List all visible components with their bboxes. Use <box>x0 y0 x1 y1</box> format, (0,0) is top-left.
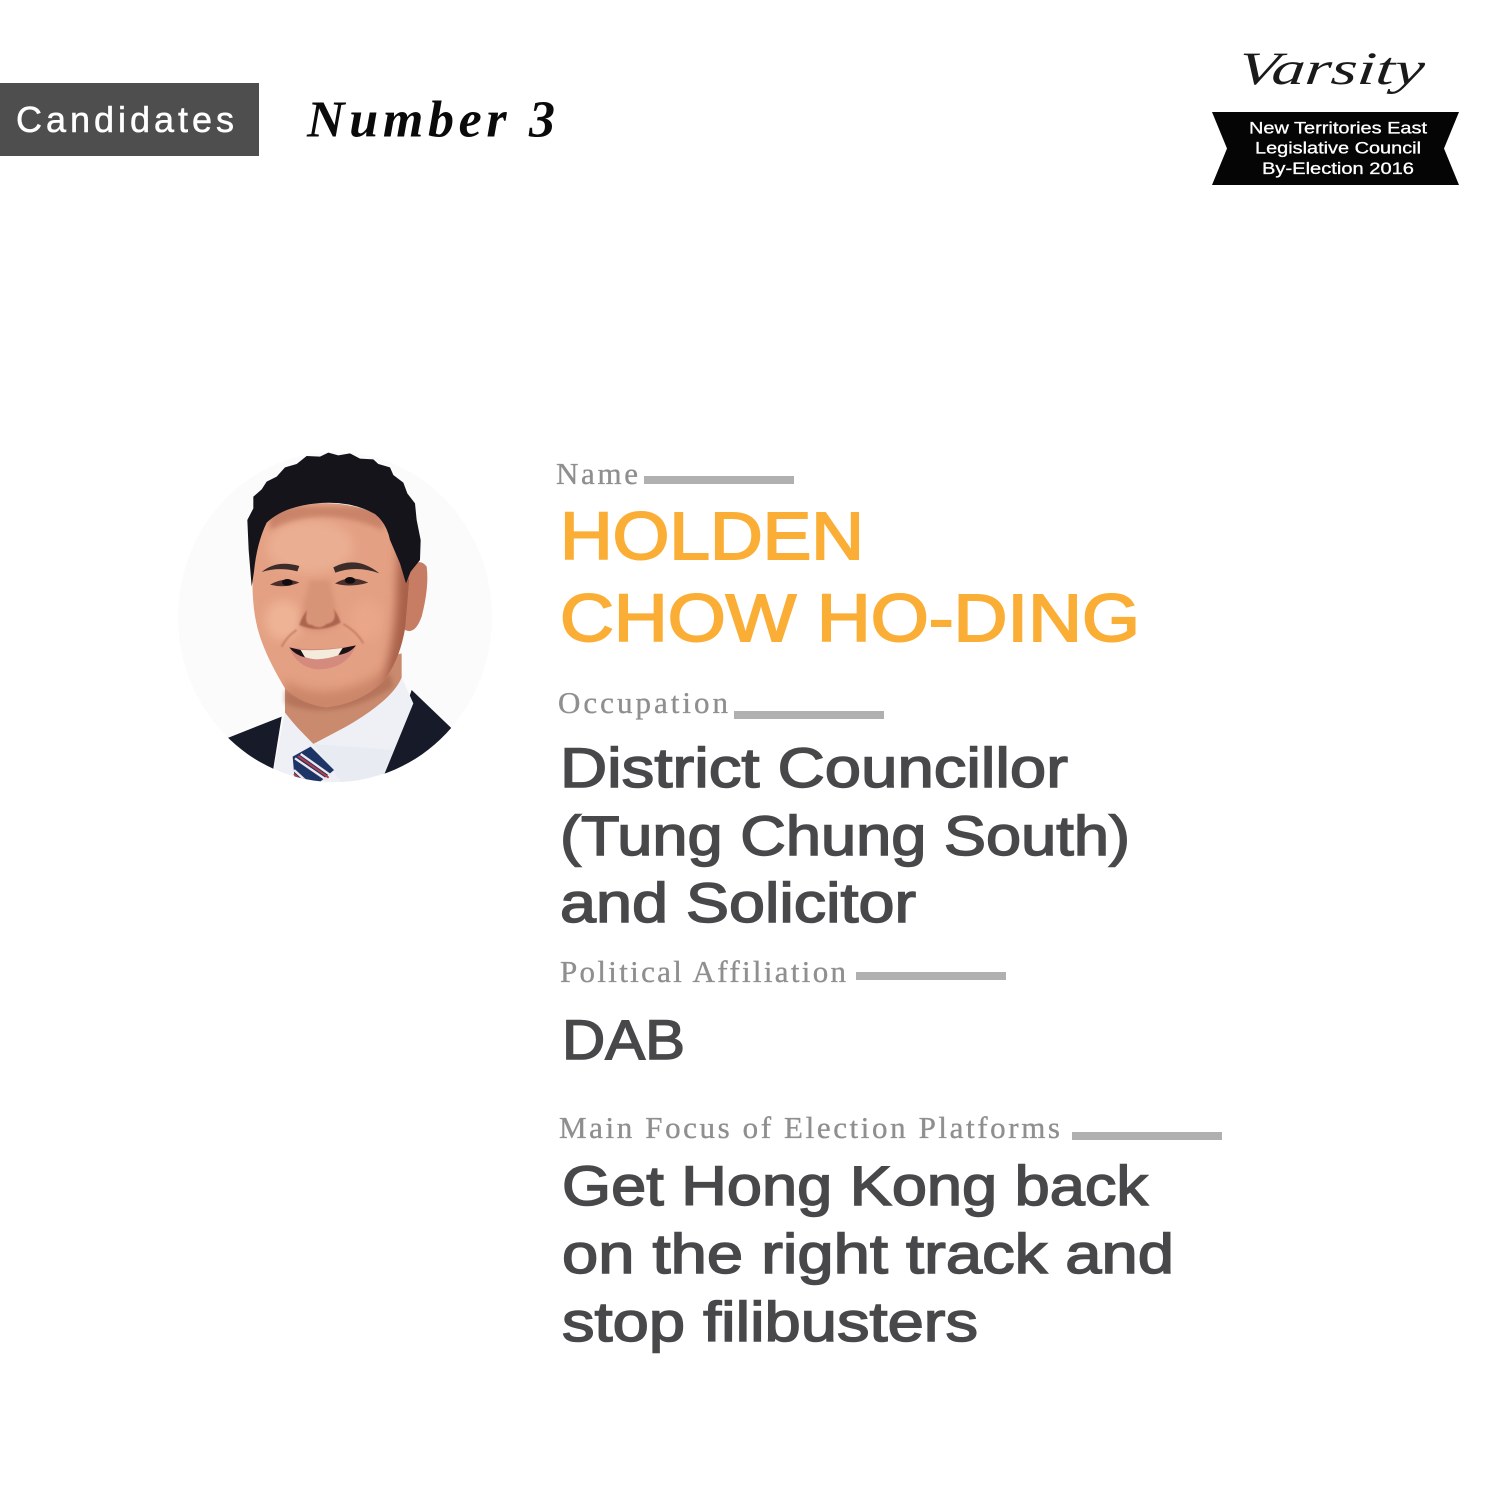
label: Main Focus of Election Platforms: Main Focus of Election Platforms <box>559 1110 1060 1145</box>
jacket <box>228 690 452 774</box>
tag: Candidates: Candidates <box>16 99 234 140</box>
portrait: candidate photo <box>228 452 452 782</box>
logo: Varsity: Varsity <box>1236 43 1428 95</box>
mouth <box>289 645 356 669</box>
name line 1: HOLDEN <box>560 499 864 574</box>
platform line 1: Get Hong Kong back <box>562 1154 1149 1217</box>
neck <box>285 653 402 744</box>
face <box>252 503 409 708</box>
section: occupation <box>558 685 1130 934</box>
rule <box>734 711 884 719</box>
ribbon: election title: New Territories East <box>1249 118 1427 138</box>
occupation line 2: (Tung Chung South) <box>560 804 1130 867</box>
section: name <box>556 456 1140 656</box>
name line 2: CHOW HO-DING <box>560 581 1140 656</box>
nose <box>299 608 341 629</box>
ribbon: election title: By-Election 2016 <box>1262 159 1414 178</box>
occupation line 1: District Councillor <box>560 736 1068 799</box>
ribbon: election title <box>1212 112 1459 185</box>
section: main focus of election platforms <box>559 1110 1222 1353</box>
hair <box>247 453 421 587</box>
eyebrows <box>262 562 379 573</box>
platform line 3: stop filibusters <box>562 1290 978 1353</box>
tag: Candidates <box>0 83 259 156</box>
rule <box>644 476 794 484</box>
label: Political Affiliation: Political Affiliation <box>560 954 846 989</box>
section: political affiliation <box>560 954 1006 1071</box>
ribbon: election title: Legislative Council <box>1255 138 1421 158</box>
smile lines <box>282 624 363 647</box>
heading: Number 3: Number 3 <box>306 92 555 148</box>
label: Name: Name <box>556 456 638 491</box>
occupation line 3: and Solicitor <box>560 871 916 934</box>
rule <box>856 972 1006 980</box>
label: Occupation: Occupation <box>558 685 728 720</box>
tie <box>293 747 334 783</box>
rule <box>1072 1132 1222 1140</box>
platform line 2: on the right track and <box>562 1222 1174 1285</box>
shirt collar <box>274 677 413 787</box>
eyes <box>270 580 299 586</box>
party: DAB: DAB <box>562 1008 685 1071</box>
ear <box>403 562 427 631</box>
